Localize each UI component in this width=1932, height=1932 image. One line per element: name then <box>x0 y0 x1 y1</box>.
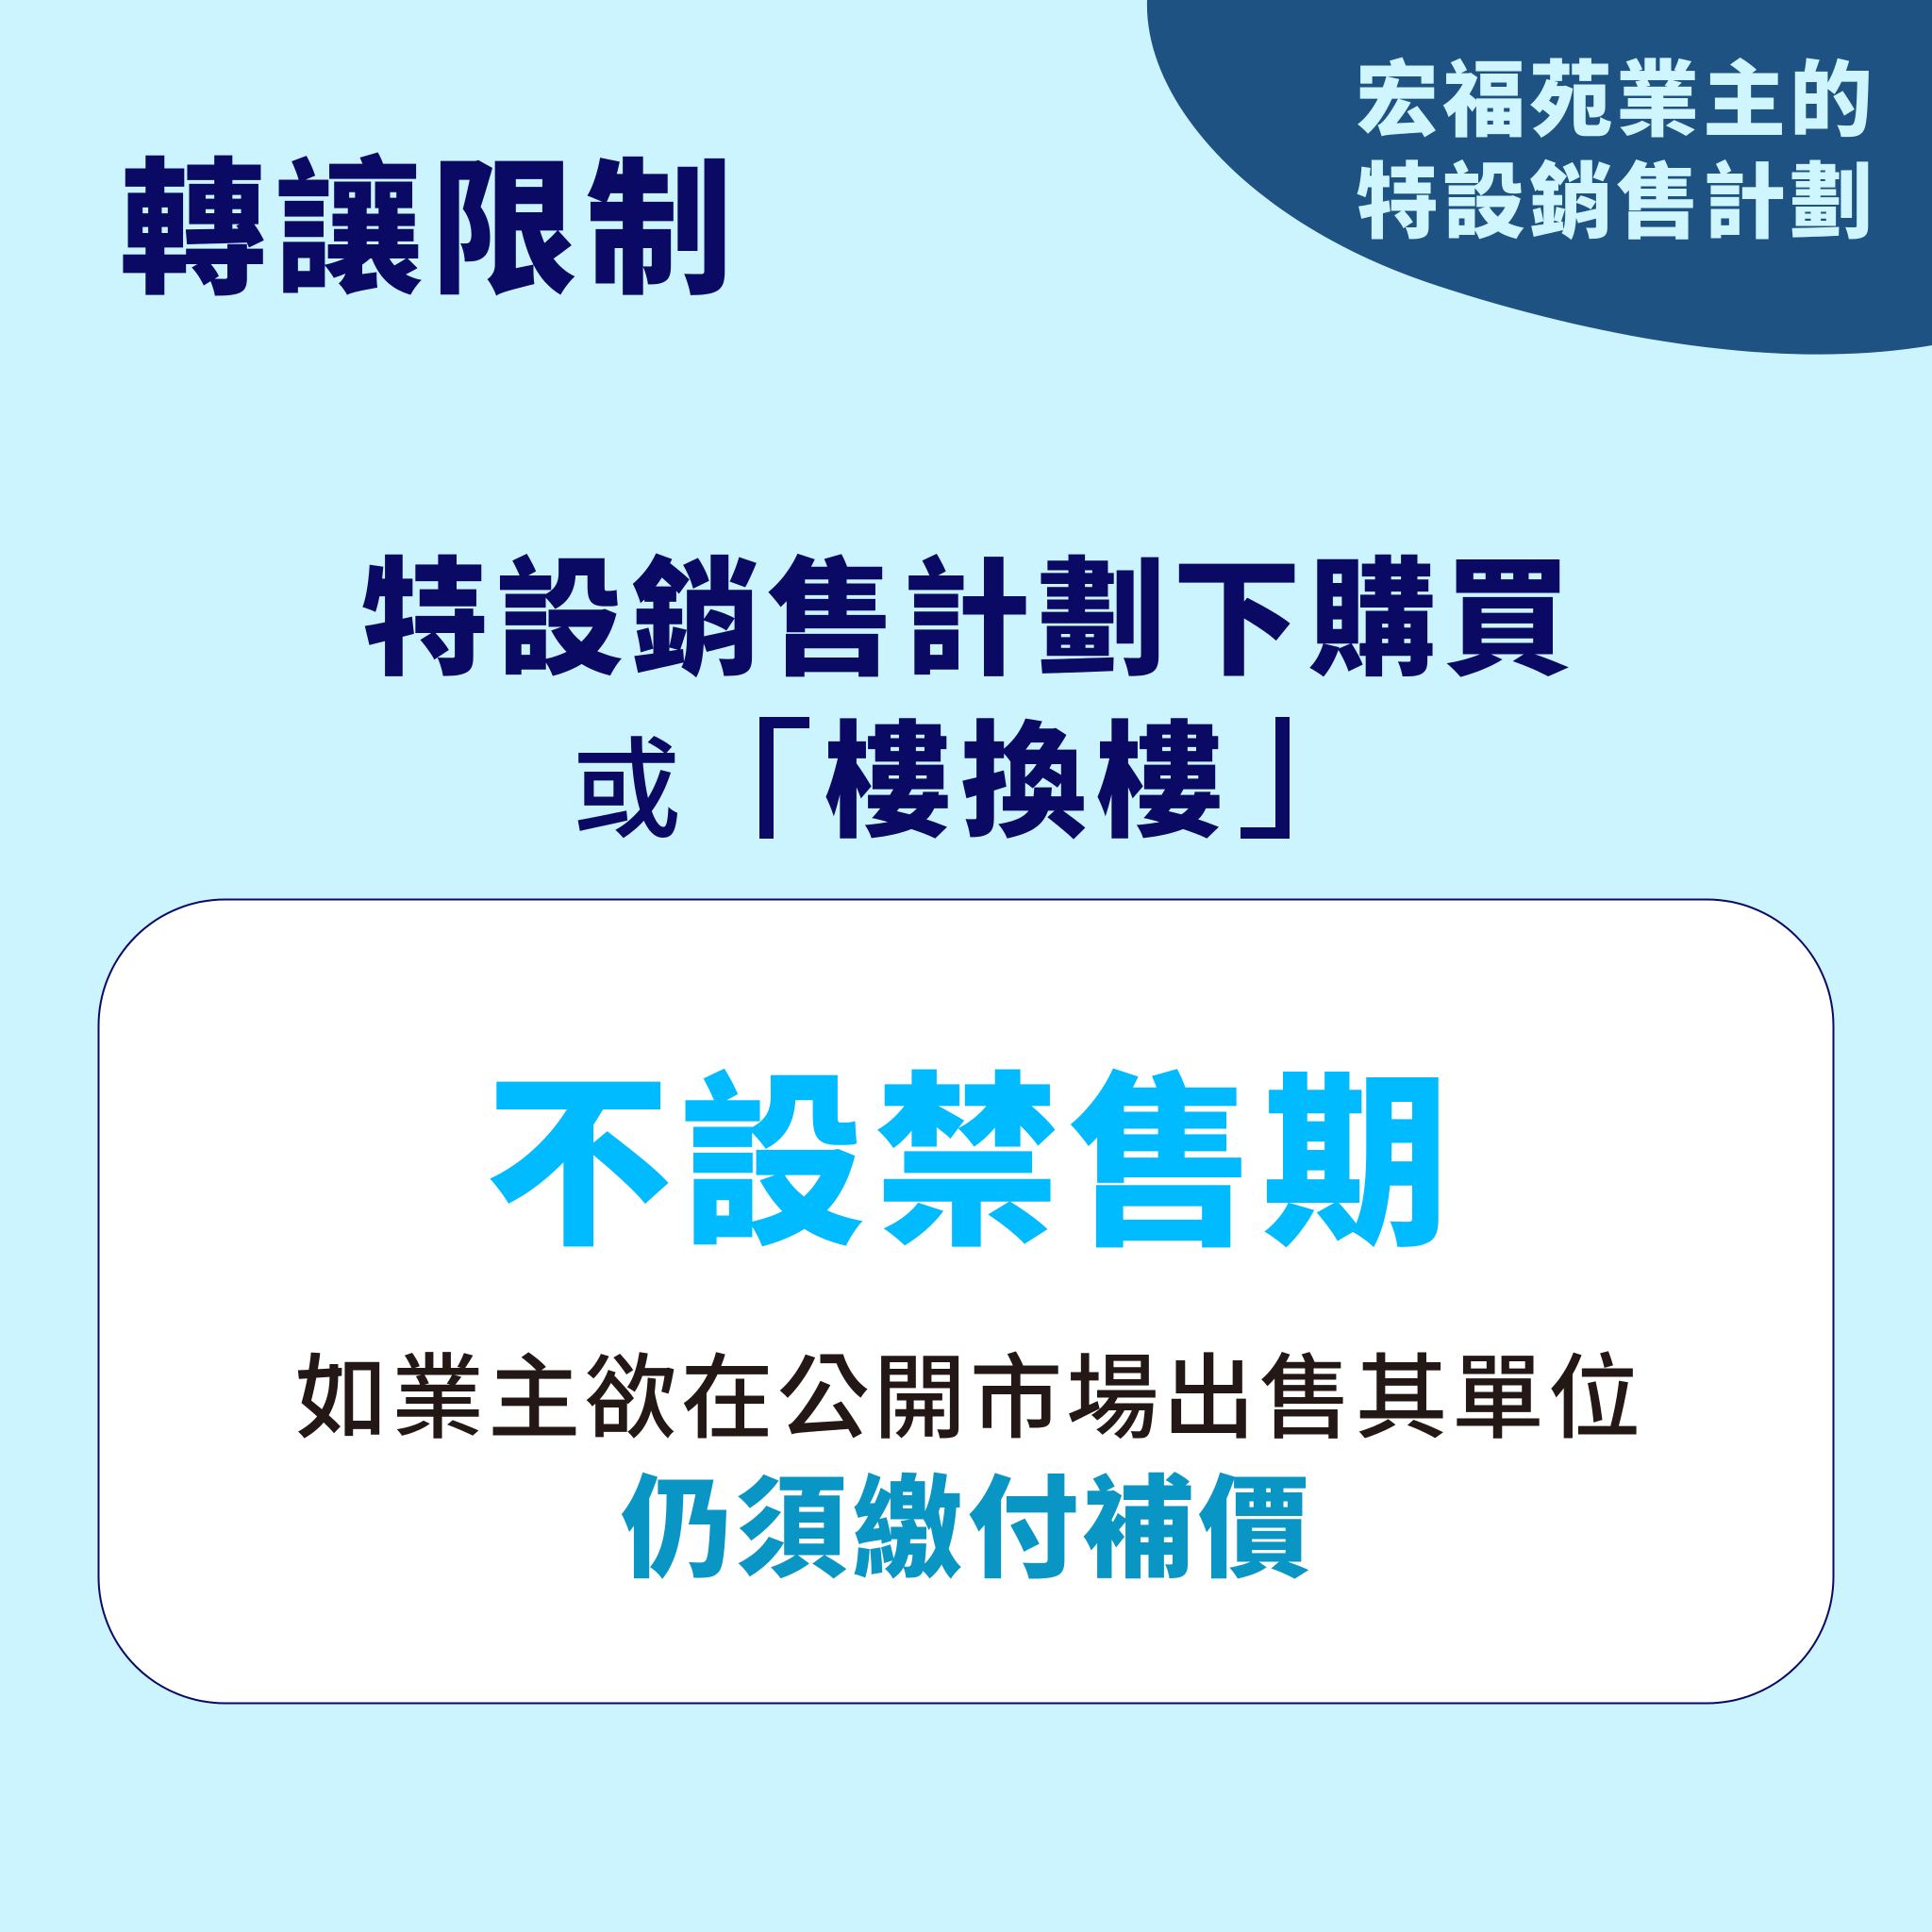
opening bracket <box>759 717 809 839</box>
emphasised phrase: 樓換樓 <box>824 713 1223 854</box>
corner label line 1: 宏福苑業主的 <box>1356 54 1873 147</box>
closing bracket <box>1241 717 1290 839</box>
panel: white rounded card <box>98 900 1834 1704</box>
card body text: 如業主欲在公開市場出售其單位 <box>295 1346 1641 1450</box>
card box <box>98 900 1834 1704</box>
connector word: 或 <box>572 729 681 852</box>
card headline: 不設禁售期 <box>485 1060 1449 1269</box>
card emphasis text: 仍須繳付補價 <box>621 1468 1309 1592</box>
corner blob <box>1147 0 1932 355</box>
heading line 2 <box>572 713 1290 854</box>
heading line 1: 特設銷售計劃下購買 <box>360 548 1572 691</box>
corner label: programme name <box>1356 54 1873 249</box>
corner label line 2: 特設銷售計劃 <box>1356 156 1873 249</box>
title: 轉讓限制 <box>120 149 733 313</box>
